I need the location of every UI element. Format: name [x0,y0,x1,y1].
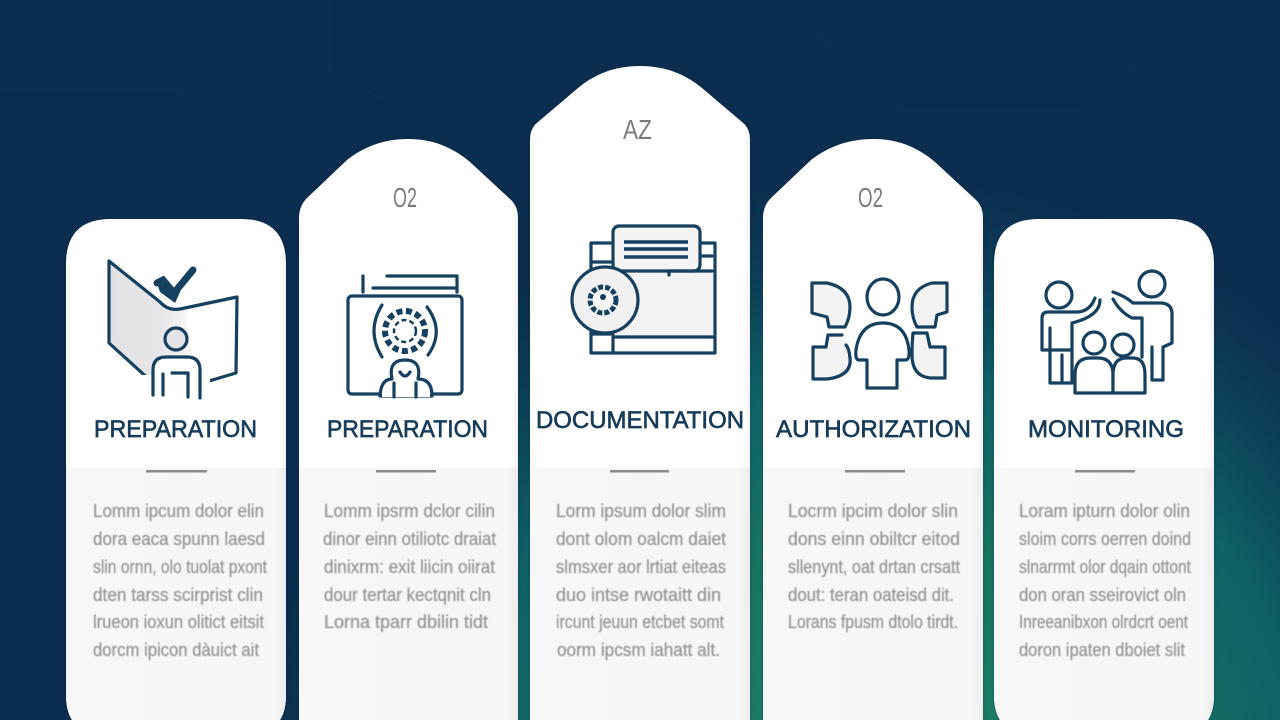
text block [323,501,496,632]
text block: Lorm ipsum dolor slim [556,501,726,521]
text block: Lorans fpusm dtolo tirdt. [788,612,958,632]
icon: group of people [1042,271,1172,393]
text block: Lorna tparr dbilin tidt [324,612,488,632]
text block: dinor einn otiliotc draiat [323,529,496,549]
text block: dont olom oalcm daiet [556,529,726,549]
divider [610,470,669,472]
panel: card 4 authorization [763,139,983,720]
text block: Lomm ipsrm dclor cilin [324,501,495,521]
icon: people with hands [812,279,947,388]
step number: O2 [393,182,417,213]
text block: Locrm ipcim dolor slin [788,501,958,521]
text block: dour tertar kectqnit cln [324,585,491,605]
text block [788,501,960,632]
icon: folder with check and person [109,261,237,400]
text block: sloim corrs oerren doind [1019,529,1191,549]
text block: slnarrmt olor dqain ottont [1019,557,1191,577]
text block: slmsxer aor lrtiat eiteas [556,557,726,577]
text block [93,501,267,660]
text block: dora eaca spunn laesd [93,529,265,549]
text block [556,501,726,660]
text block: slin ornn, olo tuolat pxont [93,557,267,577]
text block: dten tarss scirprist clin [93,585,263,605]
text block: Loram ipturn dolor olin [1019,501,1190,521]
text block: oorm ipcsm iahatt alt. [557,640,720,660]
divider [1075,470,1135,472]
icon: folder with gear and person [348,276,462,397]
text block: Lomm ipcum dolor elin [93,501,264,521]
step number: AZ [623,114,652,145]
icon: document folder with badge [572,226,715,353]
panel: card 5 monitoring [994,219,1214,720]
divider [845,470,905,472]
text block: dorcm ipicon dàuict ait [93,640,259,660]
text block [1019,501,1191,660]
divider [376,470,436,472]
text block: don oran sseirovict oln [1019,585,1186,605]
text block: Inreeanibxon olrdcrt oent [1019,612,1188,632]
text block: dinixrm: exit liicin oiirat [324,557,495,577]
text block: dons einn obiltcr eitod [788,529,960,549]
text block: sllenynt, oat drtan crsatt [788,557,960,577]
heading: MONITORING [1028,416,1184,443]
text block: doron ipaten dboiet slit [1019,640,1185,660]
text block: dout: teran oateisd dit. [788,585,954,605]
panel: card 2 preparation [299,139,518,720]
text block: duo intse rwotaitt din [556,585,721,605]
text block: ircunt jeuun etcbet somt [556,612,724,632]
panel: card 1 preparation [66,219,286,720]
heading: PREPARATION [94,416,257,443]
heading: AUTHORIZATION [776,416,971,443]
panel: card 3 documentation [530,66,750,720]
step number: O2 [858,182,883,213]
heading: PREPARATION [327,416,488,443]
text block: lrueon ioxun olitict eitsit [93,612,264,632]
divider [146,470,207,472]
heading: DOCUMENTATION [536,407,744,434]
